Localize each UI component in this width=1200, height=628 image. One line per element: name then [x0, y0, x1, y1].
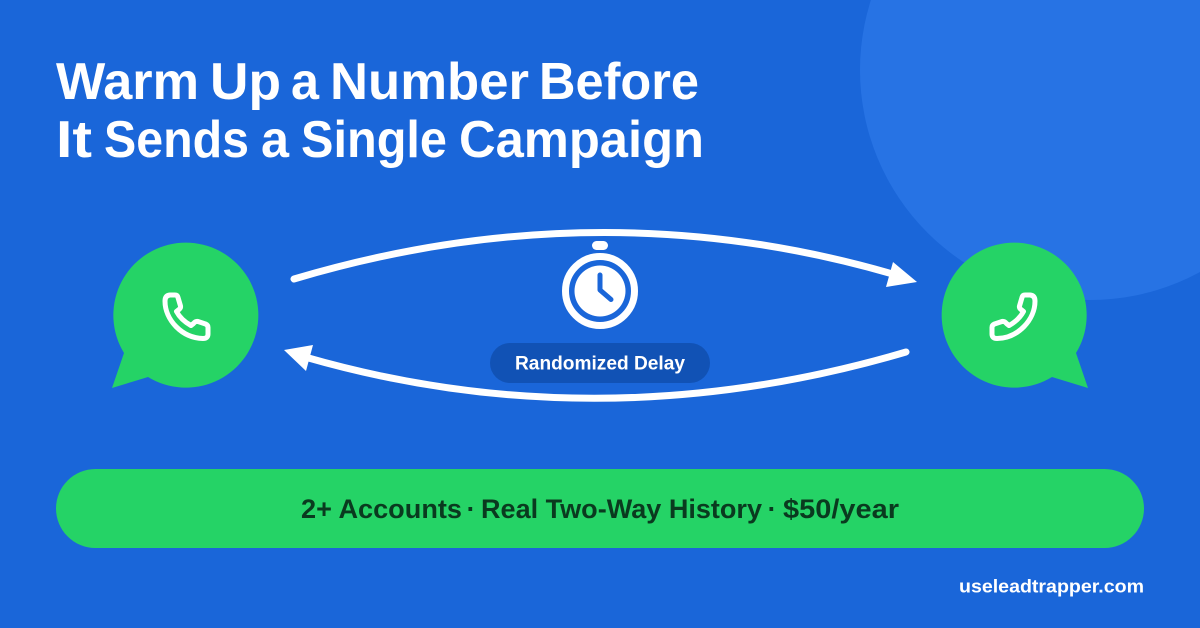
- label pill: randomized delay: [490, 343, 710, 383]
- summary bar: [56, 469, 1144, 548]
- arrow: bottom, right to left: [284, 345, 906, 398]
- title: a: [291, 53, 320, 111]
- website url: useleadtrapper.com: [959, 576, 1144, 596]
- title: Up: [210, 53, 281, 111]
- icon: right chat bubble with phone: [942, 243, 1088, 388]
- icon: left chat bubble with phone: [112, 243, 258, 388]
- summary bar: $50/year: [783, 494, 899, 524]
- arrow: top, left to right: [294, 232, 917, 287]
- title: Campaign: [459, 111, 704, 169]
- title: Sends: [104, 111, 249, 169]
- icon: left phone handset: [165, 295, 208, 338]
- title: Warm: [56, 53, 199, 111]
- summary bar: ·: [467, 494, 475, 524]
- icon: stopwatch: [566, 241, 634, 326]
- title: It: [56, 111, 92, 169]
- label pill: randomized delay: Randomized Delay: [515, 354, 685, 374]
- summary bar: ·: [768, 494, 776, 524]
- summary bar: 2+ Accounts: [301, 494, 462, 524]
- summary bar: Real Two-Way History: [481, 494, 762, 524]
- title: Before: [539, 53, 699, 111]
- icon: right phone handset: [992, 295, 1035, 338]
- title: Number: [330, 53, 529, 111]
- title: [56, 53, 704, 169]
- title: Single: [301, 111, 447, 169]
- title: a: [261, 111, 290, 169]
- background decorative circle: [860, 0, 1200, 300]
